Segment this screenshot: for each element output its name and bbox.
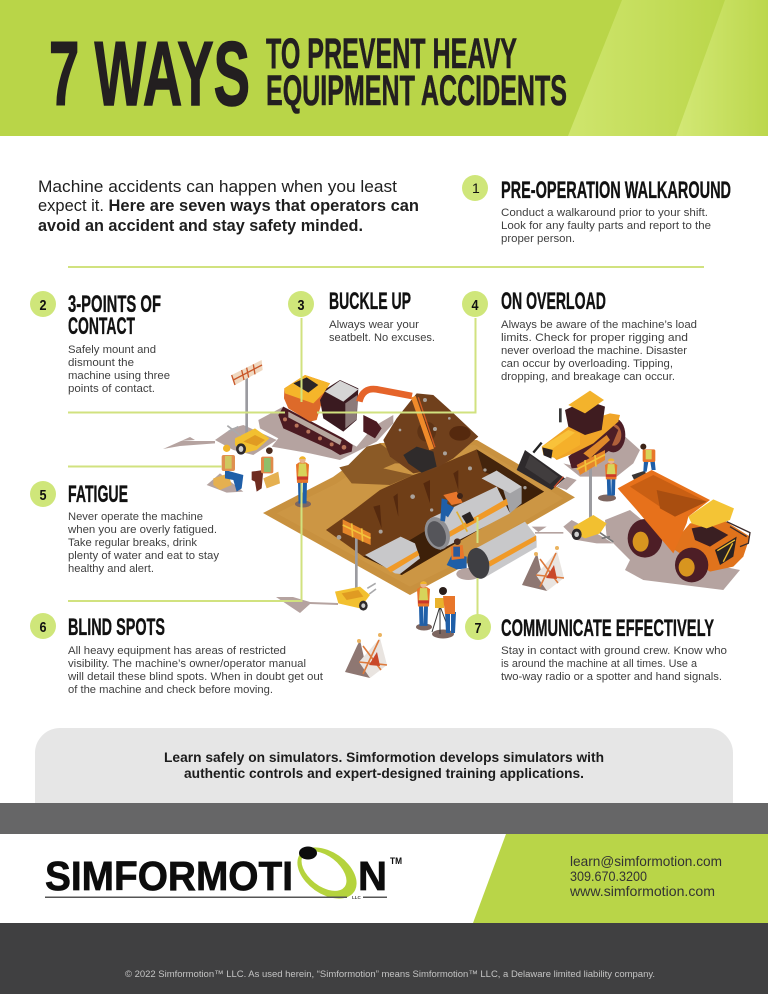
step 2: 3-points of contact: CONTACT xyxy=(68,313,135,340)
step 5: fatigue: Take regular breaks, drink xyxy=(68,537,197,549)
step 7: communicate effectively: is around the machine at all times. Use a xyxy=(501,658,698,670)
ground and trench xyxy=(263,440,575,595)
step 3: buckle up: 3 xyxy=(298,297,304,314)
step 5: fatigue: plenty of water and eat to stay xyxy=(68,550,219,562)
light tower south xyxy=(335,519,376,611)
central pipe xyxy=(420,471,522,553)
step 4: on overload: never overload the machine. Disaster xyxy=(501,345,687,357)
footer xyxy=(0,923,768,994)
step 1: pre-operation walkaround: Conduct a walkaround prior to your shift. xyxy=(501,207,708,219)
step 3: buckle up xyxy=(288,288,435,344)
step 3: buckle up: Always wear your xyxy=(329,319,419,331)
intro text: Machine accidents can happen when you least xyxy=(38,177,397,196)
intro text: expect it. Here are seven ways that operators can xyxy=(38,196,419,215)
worker with shovel xyxy=(632,444,656,482)
simulator callout: authentic controls and expert-designed training applications. xyxy=(184,766,584,781)
step 5: fatigue: healthy and alert. xyxy=(68,563,154,575)
step 7: communicate effectively: Stay in contact with ground crew. Know who xyxy=(501,645,727,657)
step 4: on overload: limits. Check for proper rigging and xyxy=(501,332,688,344)
grey band xyxy=(0,803,768,834)
kneeling worker xyxy=(447,538,467,569)
dump truck xyxy=(618,470,750,582)
step 1: pre-operation walkaround: 1 xyxy=(472,180,480,196)
step 4: on overload: can occur by overloading. Tipping, xyxy=(501,358,673,370)
step 4: on overload: 4 xyxy=(472,297,479,314)
step 6: blind spots: of the machine and check before moving. xyxy=(68,684,273,696)
step 4: on overload xyxy=(462,288,697,383)
shadows east xyxy=(532,435,740,590)
seated workers xyxy=(213,445,280,492)
step 4: on overload: dropping, and breakage can occur. xyxy=(501,371,675,383)
step 5: fatigue: FATIGUE xyxy=(68,481,128,508)
divider xyxy=(68,266,704,268)
title: EQUIPMENT ACCIDENTS xyxy=(266,67,567,115)
logo: LLC xyxy=(352,895,361,900)
step 2: 3-points of contact: Safely mount and xyxy=(68,344,156,356)
contact panel xyxy=(473,834,768,923)
step 1: pre-operation walkaround: Look for any faulty parts and report to the xyxy=(501,220,711,232)
excavator xyxy=(278,375,437,473)
step 1: pre-operation walkaround xyxy=(462,175,731,245)
light tower north-west xyxy=(227,360,269,455)
dirt pile xyxy=(383,393,478,473)
step 1: pre-operation walkaround: proper person. xyxy=(501,233,575,245)
illustration: excavation site xyxy=(163,360,750,678)
simulator callout: Learn safely on simulators. Simformotion develops simulators with xyxy=(164,750,604,765)
worker on pipe xyxy=(440,492,474,532)
south-west tower shadow xyxy=(276,597,338,613)
footer: © 2022 Simformotion™ LLC. As used herein, “Simformotion” means Simformotion™ LLC, a Delaware limited liability company. xyxy=(125,968,655,979)
logo: N xyxy=(358,853,387,899)
step 2: 3-points of contact: dismount the xyxy=(68,357,134,369)
step 5: fatigue xyxy=(30,481,219,575)
step 7: communicate effectively: 7 xyxy=(474,620,482,637)
step 6: blind spots xyxy=(30,613,324,696)
logo xyxy=(45,837,402,909)
worker east xyxy=(598,458,617,502)
simulator callout xyxy=(35,728,733,803)
step 2: 3-points of contact: 2 xyxy=(40,297,46,314)
logo: TM xyxy=(390,856,402,867)
step 3: buckle up: seatbelt. No excuses. xyxy=(329,332,435,344)
step 2: 3-points of contact xyxy=(30,291,170,395)
title: 7 WAYS xyxy=(49,24,250,125)
surveyors xyxy=(416,581,456,638)
contact panel: www.simformotion.com xyxy=(569,884,715,899)
front pipe xyxy=(456,522,537,581)
step 4: on overload: ON OVERLOAD xyxy=(501,288,606,315)
step 4: on overload: Always be aware of the machine’s load xyxy=(501,319,697,331)
light tower east xyxy=(572,450,613,542)
pipe in trench xyxy=(365,537,420,574)
shadows west xyxy=(163,407,393,493)
title xyxy=(49,24,567,125)
header banner xyxy=(0,0,768,136)
logo: SIMFORMOTI xyxy=(45,853,293,899)
step 6: blind spots: All heavy equipment has areas of restricted xyxy=(68,645,286,657)
step 6: blind spots: visibility. The machine’s owner/operator manual xyxy=(68,658,306,670)
contact panel: 309.670.3200 xyxy=(570,869,647,884)
step 5: fatigue: when you are overly fatigued. xyxy=(67,524,217,536)
barricade south xyxy=(345,633,387,678)
intro text xyxy=(38,177,419,235)
step 7: communicate effectively xyxy=(465,614,727,683)
step 2: 3-points of contact: 3-POINTS OF xyxy=(68,291,161,318)
barricade east xyxy=(522,546,564,591)
tractor xyxy=(517,391,625,490)
title: TO PREVENT HEAVY xyxy=(266,30,517,78)
step 6: blind spots: will detail these blind spots. When in doubt get out xyxy=(67,671,324,683)
connector lines xyxy=(68,318,478,615)
contact panel: learn@simformotion.com xyxy=(570,854,722,869)
step 7: communicate effectively: two-way radio or a spotter and hand signals. xyxy=(501,671,722,683)
step 5: fatigue: Never operate the machine xyxy=(68,511,203,523)
step 5: fatigue: 5 xyxy=(40,487,46,504)
step 3: buckle up: BUCKLE UP xyxy=(329,288,411,315)
step 2: 3-points of contact: machine using three xyxy=(68,370,170,382)
intro text: avoid an accident and stay safety minded. xyxy=(38,216,363,235)
step 2: 3-points of contact: points of contact. xyxy=(68,383,155,395)
standing worker west xyxy=(295,456,311,508)
step 6: blind spots: BLIND SPOTS xyxy=(68,614,165,641)
step 6: blind spots: 6 xyxy=(40,619,46,636)
